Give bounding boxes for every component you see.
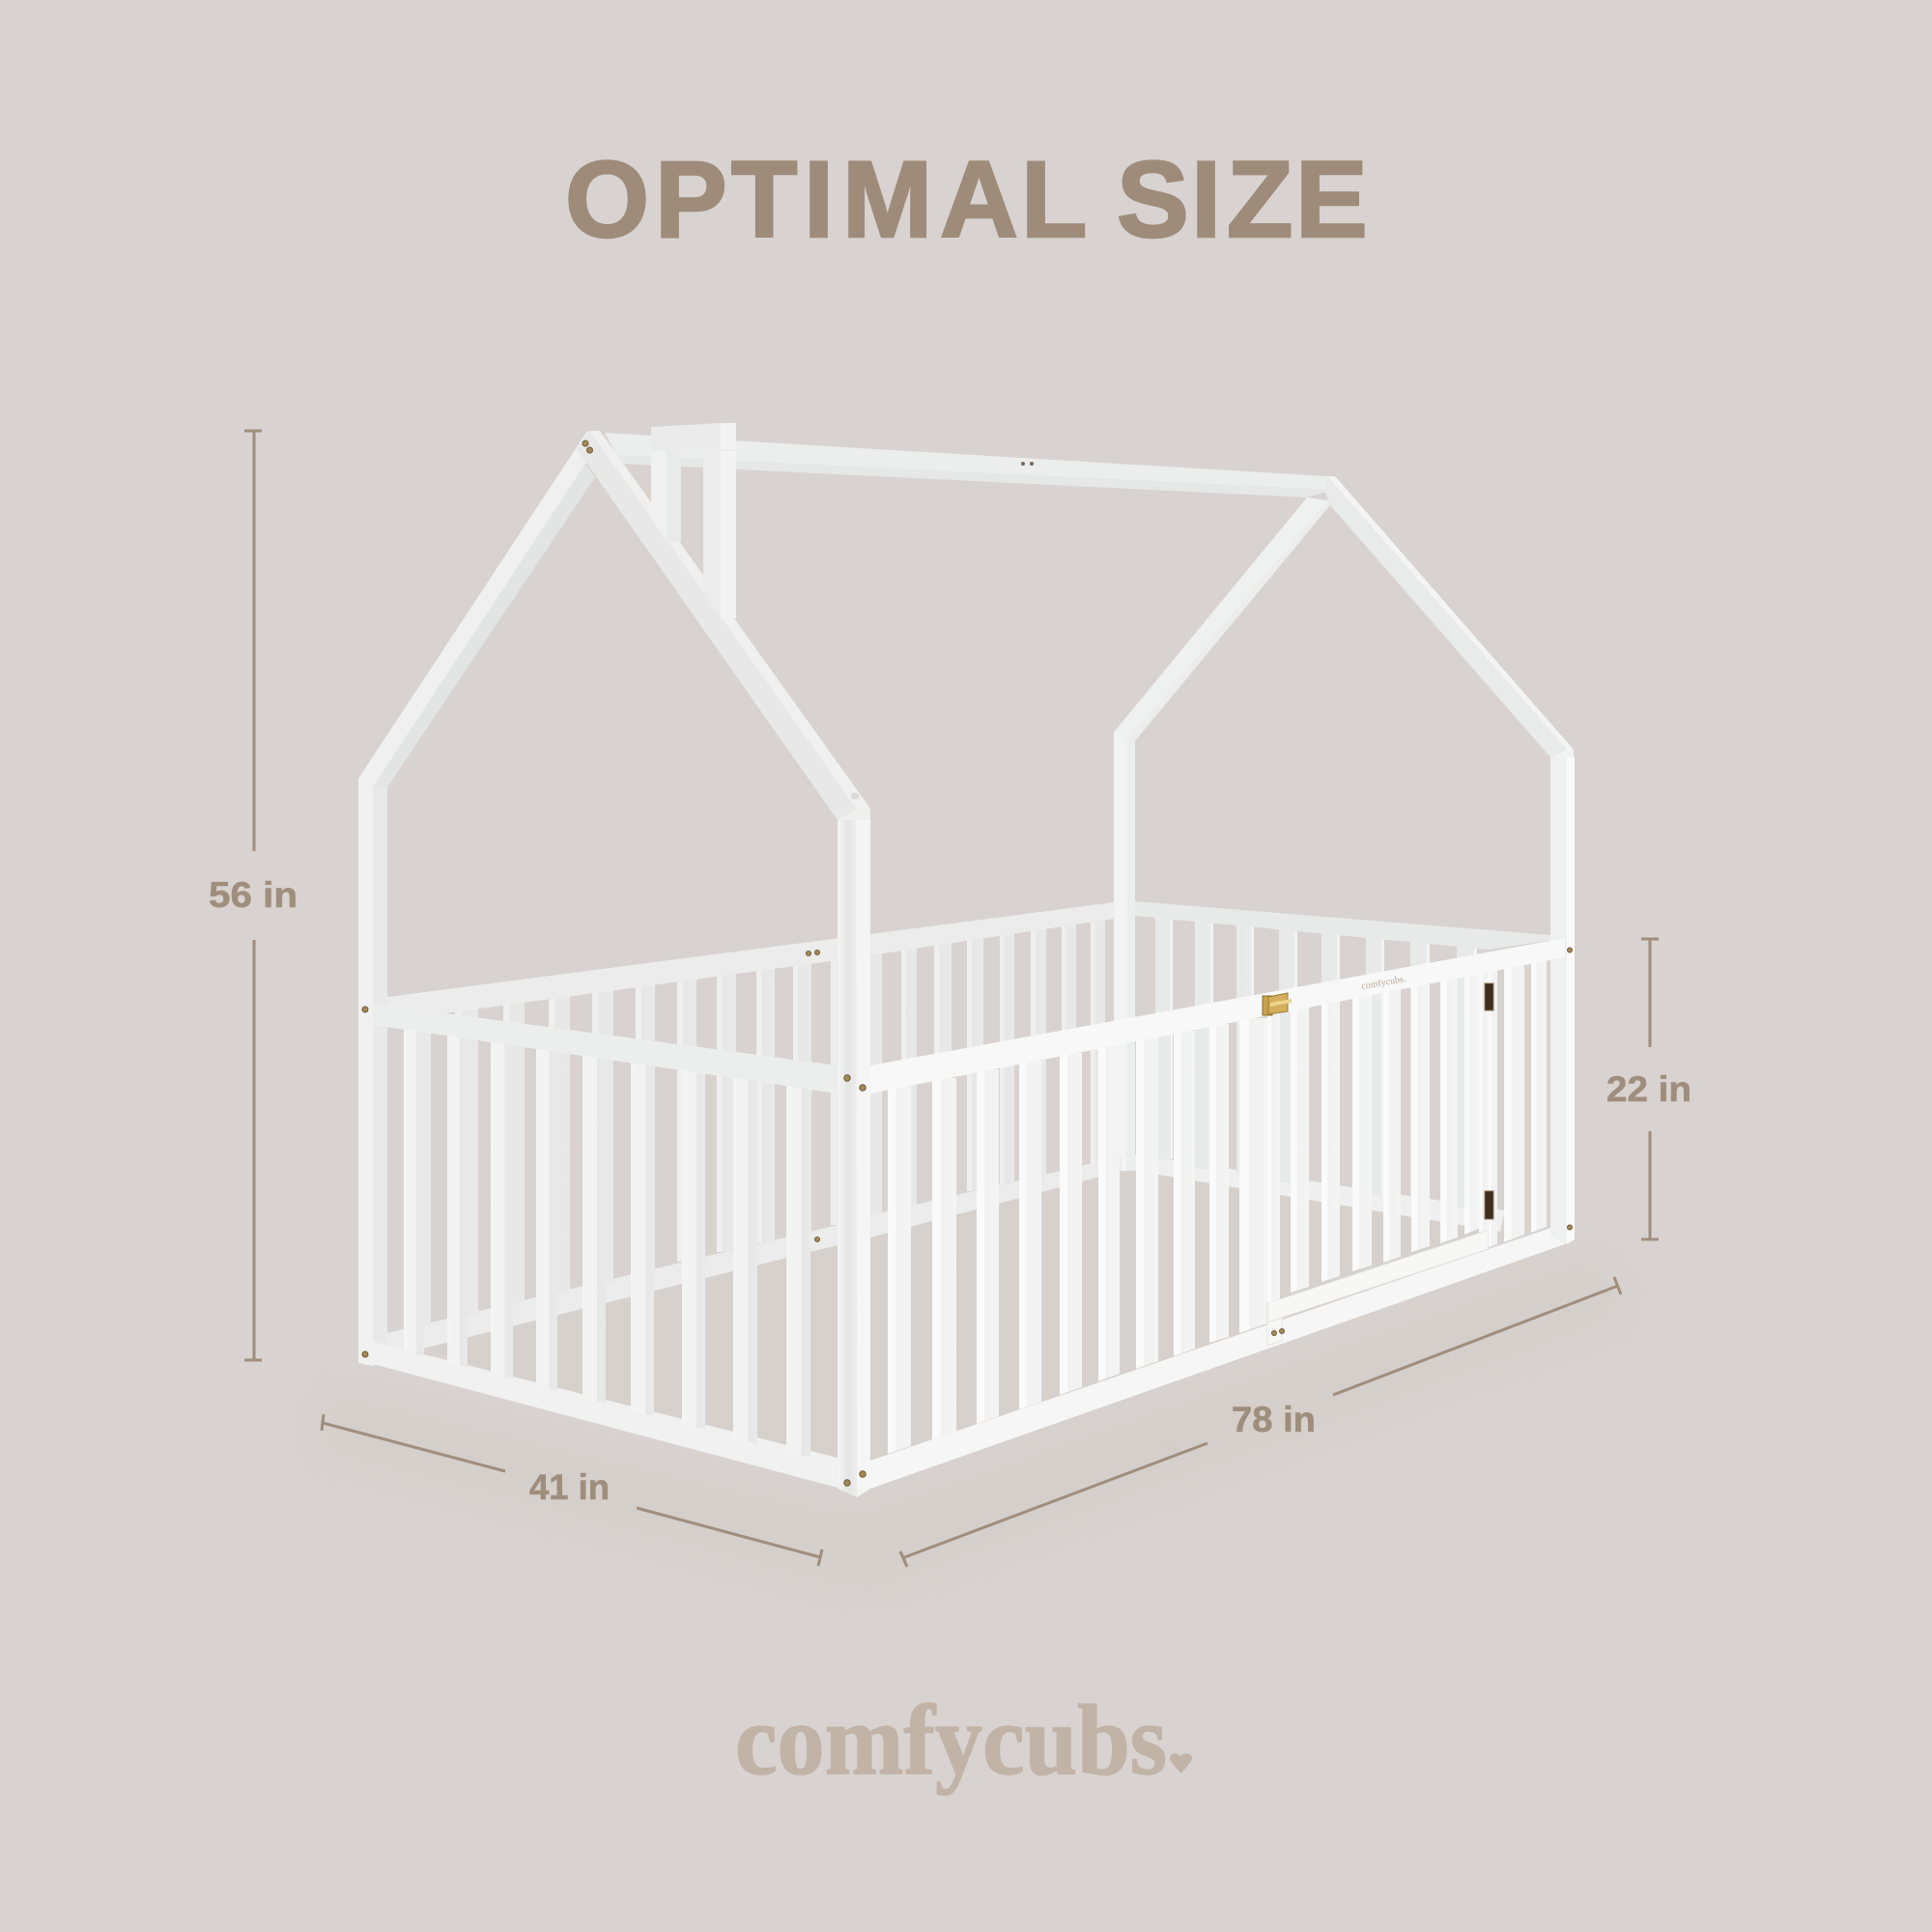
back long rail lower (387, 1156, 1122, 1357)
long panel top rail (870, 938, 1565, 1094)
bed floor area (425, 1171, 1500, 1492)
back short side slats (1155, 913, 1477, 1208)
front short panel top rail (373, 1004, 838, 1094)
brand logo: comfycubs (735, 1685, 1167, 1796)
right end slats (1489, 960, 1547, 1247)
left rafter (358, 431, 597, 787)
front short panel slats (404, 1026, 810, 1458)
height dimension 56 in: 56 in (209, 875, 298, 915)
back long rail upper (387, 902, 1115, 1021)
right rafter (577, 431, 870, 820)
right corner post (1550, 757, 1575, 1244)
width dimension 41 in (322, 1414, 822, 1566)
slat feet over bottom rail (404, 1343, 810, 1458)
front corner post (838, 820, 870, 1497)
width dimension 41 in: 41 in (529, 1467, 610, 1507)
gate latch (1263, 993, 1292, 1015)
height dimension 22 in: 22 in (1606, 1069, 1691, 1109)
gate panel (1267, 971, 1489, 1346)
upper gate hinge (1485, 983, 1493, 1010)
rafter bolt hole (850, 792, 860, 800)
roof ridge beam (605, 433, 1336, 497)
floor shadow (309, 1256, 1633, 1594)
length dimension 78 in (900, 1277, 1621, 1567)
title: OPTIMAL SIZE (565, 139, 1368, 260)
back short rail upper (1135, 901, 1565, 950)
long panel bottom rail (870, 1223, 1565, 1489)
gold screws (362, 440, 1573, 1486)
long panel slats (888, 1018, 1267, 1454)
length dimension 78 in: 78 in (1232, 1400, 1316, 1439)
chimney (651, 423, 736, 618)
small rail logo: comfycubs. (1361, 974, 1406, 992)
front short panel bottom rail (373, 1342, 838, 1488)
lower gate hinge (1485, 1191, 1493, 1219)
bed frame illustration (358, 423, 1575, 1497)
back short rail lower (1135, 1154, 1505, 1232)
left corner post (358, 779, 387, 1366)
back long side slats (411, 913, 1105, 1325)
back gable (1114, 476, 1574, 1171)
